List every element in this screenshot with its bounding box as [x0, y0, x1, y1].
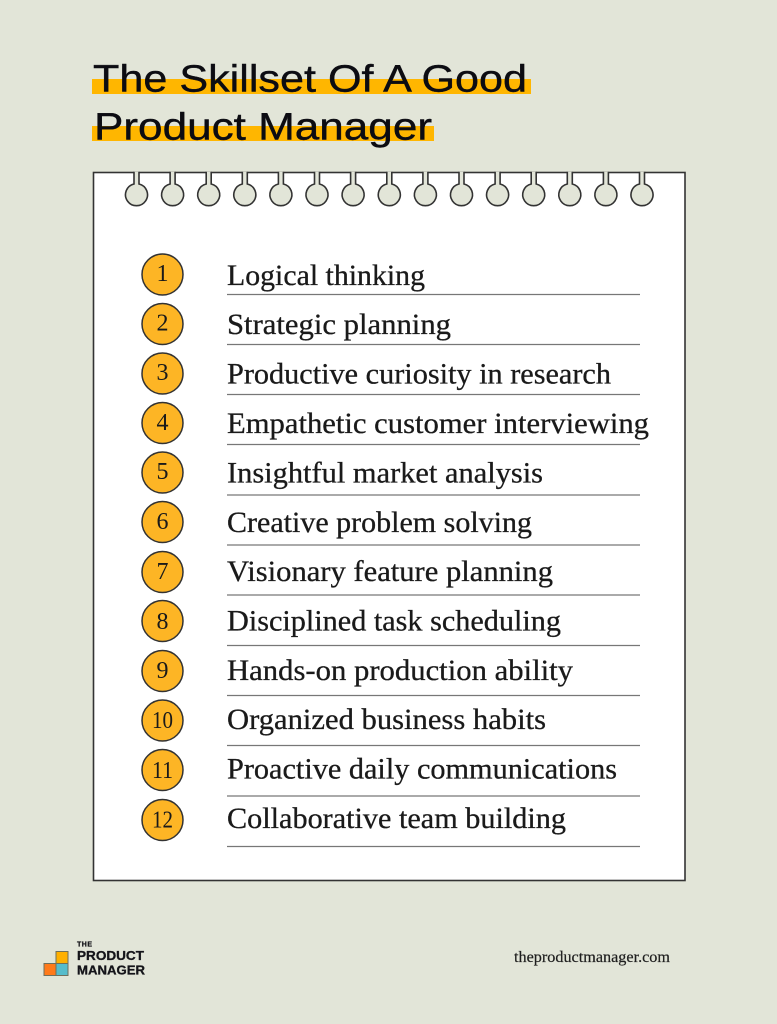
list item 5: Insightful market analysis	[227, 456, 543, 490]
list item 8	[142, 600, 640, 646]
list item 12: Collaborative team building	[227, 802, 566, 835]
panel: notepaper	[94, 172, 685, 880]
spiral binding holes	[126, 172, 653, 206]
title	[92, 58, 531, 148]
list item 9	[142, 650, 640, 696]
list item 1: Logical thinking	[227, 259, 425, 292]
list item 2: Strategic planning	[227, 308, 451, 341]
list item 4: 4	[156, 410, 168, 436]
list item 6	[142, 502, 640, 545]
list item 6: 6	[156, 509, 168, 535]
list item 7: 7	[156, 559, 168, 585]
list item 1: 1	[156, 261, 168, 287]
list item 7: Visionary feature planning	[227, 555, 553, 588]
list item 2	[142, 304, 640, 344]
list item 1	[142, 254, 640, 295]
list item 4	[142, 402, 649, 444]
list item 3	[142, 353, 640, 394]
title: Product Manager	[94, 106, 432, 148]
list item 10	[142, 700, 640, 746]
icon: logo squares	[44, 952, 68, 976]
list item 6: Creative problem solving	[227, 506, 532, 539]
list item 3: 3	[156, 360, 168, 386]
list item 5	[142, 452, 640, 495]
list item 12	[142, 800, 640, 846]
list item 10: 10	[152, 708, 173, 734]
list item 4: Empathetic customer interviewing	[227, 407, 649, 440]
list item 11: 11	[152, 758, 173, 784]
list item 8: 8	[156, 609, 168, 635]
list item 11: Proactive daily communications	[227, 752, 617, 786]
list item 8: Disciplined task scheduling	[227, 604, 561, 638]
logo: The Product Manager: THE	[77, 942, 92, 948]
title: The Skillset Of A Good	[93, 58, 527, 100]
list item 5: 5	[156, 459, 168, 485]
list item 3: Productive curiosity in research	[227, 358, 611, 390]
list item 9: 9	[156, 658, 168, 684]
list item 9: Hands-on production ability	[227, 654, 573, 687]
list item 7	[142, 552, 640, 595]
website url: theproductmanager.com	[514, 949, 670, 966]
logo: The Product Manager: PRODUCT	[77, 949, 144, 963]
list item 10: Organized business habits	[227, 703, 546, 736]
logo: The Product Manager: MANAGER	[77, 964, 145, 978]
list item 11	[142, 750, 640, 796]
logo: The Product Manager	[44, 942, 145, 978]
list item 2: 2	[156, 310, 168, 336]
list item 12: 12	[152, 808, 173, 834]
